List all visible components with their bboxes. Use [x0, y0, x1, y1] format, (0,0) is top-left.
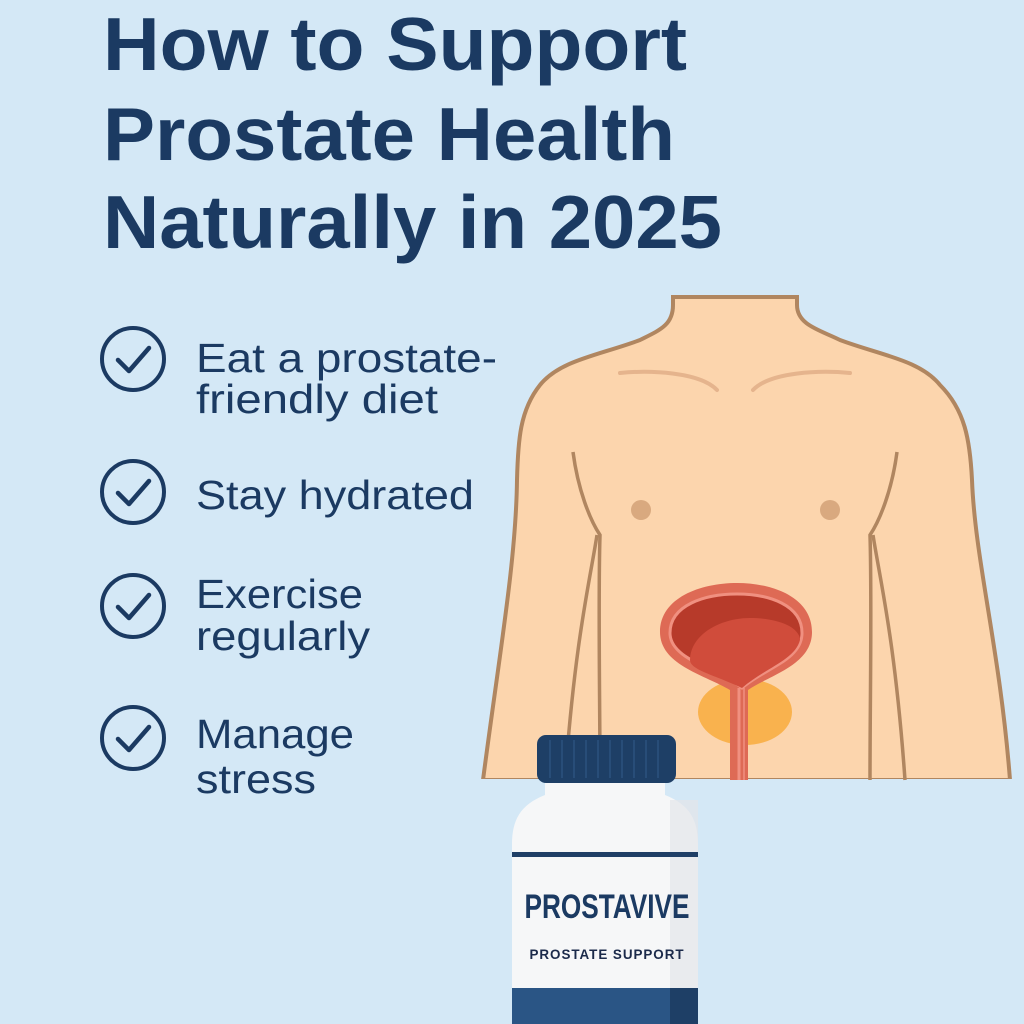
supplement bottle: PROSTATE SUPPORT [530, 946, 684, 962]
item: exercise [102, 571, 371, 659]
bladder [660, 583, 812, 780]
item: hydrated [102, 461, 474, 523]
nipples [631, 500, 651, 520]
item: hydrated: Stay hydrated [196, 472, 474, 518]
item: stress: stress [196, 756, 316, 802]
item: diet: friendly diet [196, 376, 439, 422]
arm lines [565, 452, 905, 780]
supplement bottle [512, 735, 698, 1024]
item: stress [102, 707, 354, 802]
item: diet [102, 328, 497, 422]
title: Naturally in 2025 [103, 180, 722, 264]
item: exercise: Exercise [196, 571, 363, 617]
checklist [102, 328, 497, 802]
item: diet: Eat a prostate- [196, 335, 497, 381]
clavicles [620, 372, 717, 390]
item: exercise: regularly [196, 613, 371, 659]
bottle cap [537, 735, 676, 783]
title: Prostate Health [103, 92, 675, 176]
bottle bottom band [512, 988, 698, 1024]
title: How to Support [103, 2, 687, 86]
item: stress: Manage [196, 711, 354, 757]
bottle label text: PROSTAVIVE [524, 888, 690, 926]
title [103, 2, 722, 264]
torso illustration [470, 297, 1020, 785]
prostate [698, 679, 792, 745]
